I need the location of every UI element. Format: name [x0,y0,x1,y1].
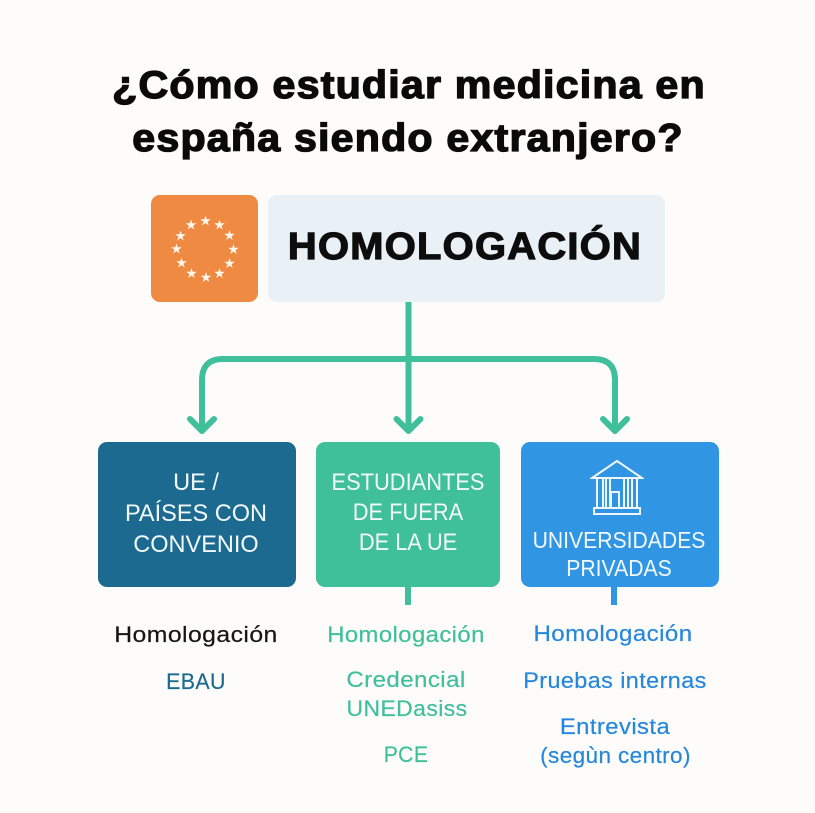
panel: estudiantes de fuera de la UE [316,442,500,587]
text: column 2 list: Homologación [327,622,484,647]
text: column 2 list: Credencial [346,667,466,692]
panel: homologación heading: HOMOLOGACIÓN [287,226,642,268]
icon: EU flag stars [151,195,258,302]
text: column 2 list [327,622,484,767]
title: ¿Cómo estudiar medicina en [112,64,705,107]
icon: university building [590,460,644,515]
panel: universidades privadas: UNIVERSIDADES [532,527,705,553]
panel: estudiantes de fuera de la UE: DE LA UE [359,529,457,556]
text: column 1 list: EBAU [166,669,225,694]
panel: homologación heading [268,195,665,302]
title: españa siendo extranjero? [132,117,683,160]
title [112,64,705,160]
panel: UE / países con convenio: UE / [173,469,219,496]
text: column 3 list [523,621,706,768]
text: column 1 list: Homologación [114,622,277,647]
text: column 3 list: (segùn centro) [540,743,691,768]
text: column 1 list [114,622,277,694]
panel: estudiantes de fuera de la UE: ESTUDIANTES [332,469,484,496]
connector stub: blue [611,587,617,605]
panel: universidades privadas [521,442,719,587]
panel: UE / países con convenio: CONVENIO [133,531,259,558]
panel: UE / países con convenio [98,442,296,587]
text: column 3 list: Entrevista [560,714,670,739]
panel: estudiantes de fuera de la UE: DE FUERA [353,499,463,526]
panel: UE / países con convenio: PAÍSES CON [125,500,267,527]
panel: universidades privadas: PRIVADAS [566,555,671,581]
text: column 2 list: UNEDasiss [347,696,467,721]
text: column 3 list: Homologación [533,621,693,646]
text: column 3 list: Pruebas internas [523,668,706,693]
text: column 2 list: PCE [384,742,428,767]
connector stub: green [405,587,411,605]
